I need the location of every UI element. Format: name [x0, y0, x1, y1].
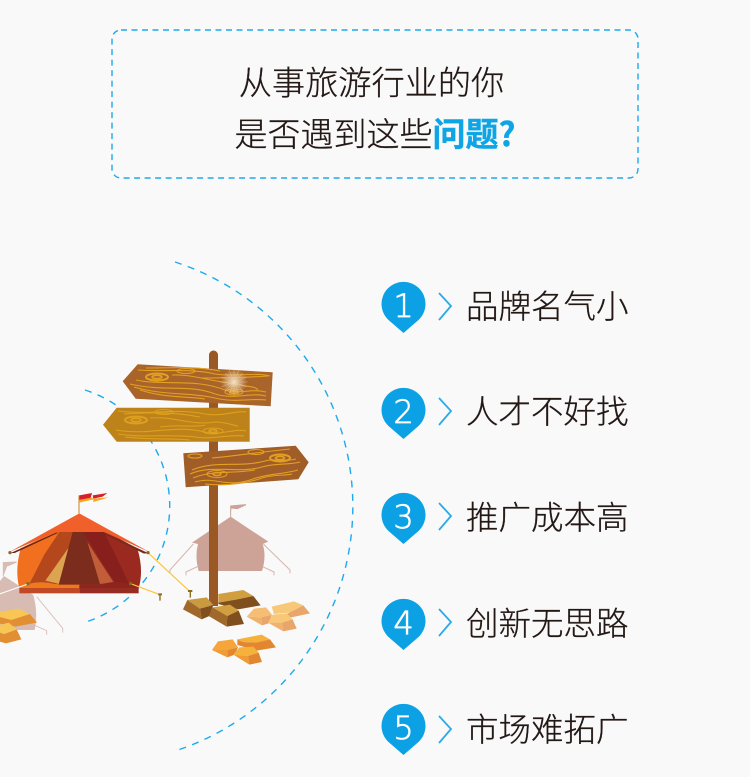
tent roof — [9, 513, 149, 552]
title text: 从事旅游行业的你 — [239, 56, 504, 104]
tent: red circus tent — [0, 493, 192, 601]
rocks at base of post — [183, 597, 244, 627]
pin 5 — [382, 704, 426, 755]
label 1: 品牌名气小 — [466, 281, 629, 328]
pin 3: 3 — [393, 498, 414, 536]
tent flag — [79, 493, 109, 513]
label 3: 推广成本高 — [466, 492, 629, 539]
label 5: 市场难拓广 — [466, 704, 629, 751]
signpost — [103, 351, 309, 606]
chevron 3 — [439, 503, 451, 530]
sign: bottom — [183, 446, 309, 487]
chevron 2 — [439, 398, 451, 425]
chevron 5 — [439, 716, 451, 743]
tent body — [17, 530, 79, 588]
label 4: 创新无思路 — [466, 598, 629, 645]
pin 5: 5 — [393, 709, 414, 747]
chevron 1 — [439, 293, 451, 320]
sign sparkle — [220, 369, 248, 395]
list item 1 — [382, 281, 629, 333]
tent ropes — [131, 553, 190, 595]
list item 4 — [382, 598, 629, 650]
gold bricks: orange — [212, 635, 276, 665]
label 2: 人才不好找 — [466, 386, 629, 433]
title box — [112, 30, 638, 178]
pin 3 — [382, 493, 426, 544]
rock behind post — [218, 590, 261, 609]
list item 2 — [382, 386, 629, 439]
title text — [235, 56, 515, 156]
gold bricks: left — [0, 609, 37, 643]
gold bricks: light — [247, 601, 310, 631]
ghost tent: behind post — [170, 505, 290, 575]
sign: middle — [103, 408, 250, 442]
signpost pole — [209, 351, 218, 606]
dashed arcs — [85, 262, 353, 750]
list item 3 — [382, 492, 629, 544]
ghost tent: left — [0, 562, 63, 635]
pin 1 — [382, 282, 426, 333]
pin 4 — [382, 599, 426, 650]
pin 4: 4 — [393, 604, 414, 642]
title text: 是否遇到这些问题? — [235, 108, 515, 156]
pin 1: 1 — [393, 287, 414, 325]
list item 5 — [382, 704, 629, 755]
sign: top — [123, 364, 273, 406]
pin 2: 2 — [393, 393, 414, 431]
chevron 4 — [439, 609, 451, 636]
pin 2 — [382, 388, 426, 439]
